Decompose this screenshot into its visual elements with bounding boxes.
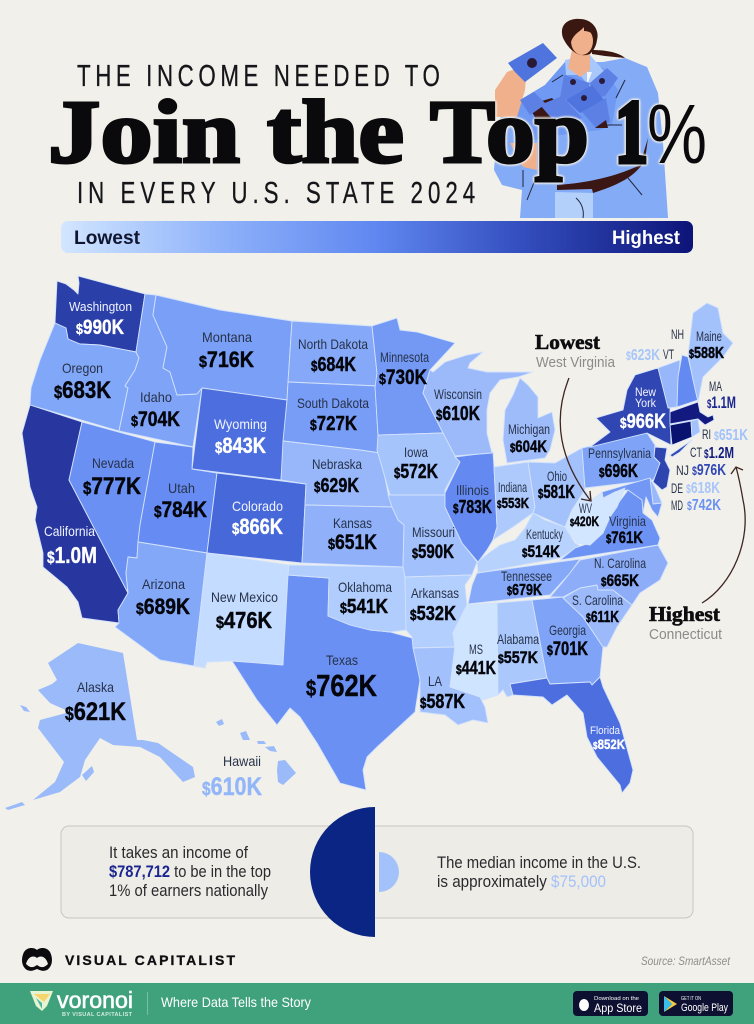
- state: Arkansas: [405, 575, 472, 648]
- label: Idaho: Idaho: [140, 389, 172, 405]
- label: Hawaii: $610K: [202, 773, 262, 801]
- map of U.S. states: [5, 276, 733, 810]
- label: Tennessee: $679K: [507, 582, 542, 599]
- state: Massachusetts: [670, 402, 714, 425]
- button: App Store: Download on the: [594, 996, 639, 1002]
- label: South Carolina: $611K: [586, 609, 619, 626]
- label: Vermont: VT: [663, 346, 674, 362]
- state: Washington: [55, 276, 145, 352]
- label: Montana: [199, 329, 254, 372]
- label: Wisconsin: Wisconsin: [434, 386, 482, 402]
- label: New Mexico: New Mexico: [211, 589, 278, 605]
- label: Alabama: $557K: [498, 648, 539, 667]
- button: Google Play: Google Play: [681, 1002, 728, 1014]
- label: Delaware: $618K: [686, 480, 720, 497]
- label: Oregon: [54, 360, 112, 404]
- title: The income needed to: THE INCOME NEEDED TO: [77, 58, 440, 93]
- label: Arizona: Arizona: [142, 576, 185, 592]
- state: North Dakota: [288, 321, 378, 386]
- label: Nevada: $777K: [83, 473, 142, 500]
- source: Source: SmartAsset: [641, 954, 731, 968]
- label: Nevada: Nevada: [92, 455, 134, 471]
- label: North Carolina: N. Carolina: [594, 555, 646, 571]
- state: South Dakota: [283, 382, 380, 453]
- label: South Dakota: [297, 395, 369, 435]
- label: South Dakota: South Dakota: [297, 395, 369, 411]
- label: Iowa: [394, 444, 438, 483]
- label: Kansas: Kansas: [333, 515, 372, 531]
- state: Idaho: [119, 294, 202, 447]
- label: Indiana: Indiana: [498, 479, 527, 495]
- label: Arizona: $689K: [136, 594, 190, 619]
- label: Illinois: [453, 482, 492, 517]
- text: top 1% national income: $787,712 to be in the top: [109, 863, 271, 881]
- label: Maine: Maine: [696, 328, 722, 344]
- state: Kansas: [302, 505, 404, 567]
- label: Wisconsin: [434, 386, 482, 425]
- label: Utah: Utah: [168, 480, 195, 496]
- state: Pennsylvania: [582, 433, 662, 488]
- label: South Carolina: S. Carolina: [572, 592, 623, 608]
- label: Utah: $784K: [154, 497, 207, 522]
- label: Louisiana: LA: [428, 673, 443, 689]
- label: Pennsylvania: Pennsylvania: [588, 445, 651, 461]
- arrow: to Connecticut: [702, 467, 745, 603]
- label: Washington: [69, 299, 132, 339]
- logo: Visual Capitalist: VISUAL CAPITALIST: [65, 952, 235, 968]
- legend bar: lowest to highest: Highest: [612, 228, 681, 249]
- label: Maine: [689, 328, 724, 362]
- state: Alabama: [497, 600, 547, 697]
- label: Delaware: [671, 480, 720, 497]
- text: median income: The median income in the U.S.: [437, 854, 641, 872]
- state: Oregon: [30, 323, 139, 431]
- label: Missouri: $590K: [412, 542, 454, 563]
- illustration: woman holding money: [494, 19, 668, 218]
- label: Illinois: $783K: [453, 497, 492, 517]
- label: Massachusetts: MA: [709, 378, 722, 394]
- title: Join the Top 1%: [48, 83, 707, 182]
- legend bar: lowest to highest: [61, 221, 693, 253]
- label: Alaska: Alaska: [77, 679, 114, 695]
- state: Ohio: [528, 448, 585, 527]
- label: Alabama: [497, 631, 539, 667]
- label: Colorado: Colorado: [232, 498, 283, 514]
- label: South Dakota: $727K: [310, 413, 357, 435]
- text: top 1% national income: It takes an income of: [109, 844, 248, 862]
- label: New Mexico: $476K: [216, 607, 272, 633]
- state: Louisiana: [413, 647, 488, 725]
- label: Virginia: [606, 513, 646, 547]
- label: Nebraska: [312, 456, 362, 497]
- label: Florida: Florida: [590, 725, 621, 737]
- label: Oklahoma: Oklahoma: [338, 579, 392, 595]
- label: Alaska: [65, 679, 126, 726]
- label: North Carolina: $665K: [601, 571, 640, 590]
- state: Alaska: [33, 643, 195, 800]
- state: Florida: [510, 677, 633, 793]
- state: South Carolina: [563, 585, 632, 647]
- state: New Jersey: [653, 447, 670, 490]
- label: Minnesota: Minnesota: [380, 349, 429, 365]
- title: In every U.S. state 2024: IN EVERY U.S. STATE 2024: [77, 175, 475, 210]
- label: Oklahoma: [338, 579, 392, 618]
- label: Ohio: [538, 468, 575, 502]
- state: Utah: [138, 442, 217, 553]
- label: Tennessee: [501, 568, 552, 599]
- state: Delaware: [650, 478, 662, 504]
- label: Texas: $762K: [306, 668, 378, 703]
- state: New York: [590, 368, 671, 447]
- label: South Carolina: [572, 592, 623, 626]
- label: Massachusetts: $1.1M: [707, 393, 736, 412]
- state: Arizona: [115, 542, 207, 666]
- label: Washington: $990K: [76, 316, 124, 339]
- label: Alaska: $621K: [65, 698, 126, 726]
- title: Join the Top 1%: %: [647, 87, 707, 181]
- label: Nebraska: $629K: [314, 475, 359, 497]
- label: New Jersey: $976K: [692, 462, 726, 479]
- label: New Hampshire abbreviation: NH: [671, 326, 684, 342]
- label: Mississippi: $441K: [456, 658, 496, 678]
- callout: lowest West Virginia: Lowest: [535, 330, 600, 354]
- label: Nevada: [83, 455, 142, 500]
- label: Arkansas: Arkansas: [411, 585, 459, 601]
- state: Nebraska: [281, 441, 392, 507]
- label: Connecticut: $1.2M: [704, 445, 734, 462]
- state: Illinois: [445, 452, 497, 562]
- state: Connecticut: [670, 421, 692, 445]
- label: Virginia: Virginia: [609, 513, 646, 529]
- label: Maine: $588K: [689, 345, 724, 362]
- label: Missouri: [412, 524, 455, 563]
- label: Kansas: [328, 515, 377, 554]
- button: App Store: [573, 991, 648, 1016]
- label: Rhode Island: [702, 426, 748, 444]
- label: Vermont: $623K: [626, 347, 660, 364]
- label: Wyoming: $843K: [215, 433, 266, 458]
- label: Ohio: Ohio: [547, 468, 567, 484]
- label: Georgia: Georgia: [549, 622, 586, 638]
- callout: lowest West Virginia: West Virginia: [536, 354, 616, 371]
- label: Arkansas: [410, 585, 459, 625]
- label: Rhode Island: RI: [702, 426, 711, 442]
- label: Maryland: [671, 497, 721, 514]
- state: Rhode Island: [691, 419, 700, 437]
- state: Oklahoma: [288, 565, 407, 632]
- state: Montana: [153, 295, 292, 400]
- label: Idaho: $704K: [131, 408, 180, 431]
- label: New York: $966K: [620, 410, 666, 433]
- state: Wisconsin and Michigan upper: [423, 352, 533, 456]
- title: Join the Top 1%: Join: [48, 83, 240, 182]
- label: Alabama: Alabama: [497, 631, 539, 647]
- title: Join the Top 1%: Top: [430, 83, 589, 182]
- label: Maryland: $742K: [687, 497, 721, 514]
- callout: highest Connecticut: Connecticut: [649, 626, 723, 643]
- title: Join the Top 1%: the: [267, 83, 404, 182]
- label: Indiana: $553K: [497, 495, 529, 512]
- label: North Dakota: [298, 336, 368, 376]
- state: California: [22, 405, 128, 623]
- label: Oregon: $683K: [54, 377, 112, 404]
- panel: national vs median comparison: [61, 826, 693, 918]
- label: Minnesota: $730K: [379, 366, 427, 389]
- label: Delaware: DE: [671, 480, 683, 496]
- label: Indiana: [497, 479, 529, 512]
- text: top 1% national income: [109, 844, 271, 900]
- label: Virginia: $761K: [606, 528, 644, 547]
- label: Kansas: $651K: [328, 531, 377, 554]
- label: Georgia: [547, 622, 588, 660]
- state: Michigan lower: [503, 378, 555, 463]
- label: New Jersey: NJ: [676, 462, 689, 478]
- button: Google Play: GET IT ON: [681, 996, 701, 1002]
- logo: Voronoi: [30, 987, 133, 1018]
- footer bar: [0, 983, 754, 1024]
- label: Missouri: Missouri: [412, 524, 455, 540]
- label: Nebraska: Nebraska: [312, 456, 362, 472]
- label: North Carolina: [594, 555, 646, 590]
- logo: Visual Capitalist: [22, 948, 235, 971]
- label: Ohio: $581K: [538, 482, 575, 502]
- state: New Hampshire: [677, 355, 698, 407]
- label: Louisiana: [420, 673, 465, 713]
- arrow: to West Virginia: [560, 378, 591, 501]
- label: West Virginia: WV: [579, 500, 592, 516]
- label: Maryland: MD: [671, 497, 683, 513]
- callout: lowest West Virginia: [535, 330, 616, 371]
- label: Mississippi: MS: [469, 641, 483, 657]
- state: Missouri: [388, 495, 477, 577]
- state: Maine: [688, 303, 733, 402]
- label: Connecticut: [690, 444, 734, 462]
- label: Pennsylvania: [588, 445, 651, 481]
- label: Oregon: Oregon: [62, 360, 103, 376]
- label: West Virginia: [570, 500, 599, 529]
- label: North Dakota: $684K: [311, 354, 356, 376]
- label: Mississippi: [456, 641, 496, 678]
- label: New Mexico: [211, 589, 278, 633]
- label: Hawaii: [202, 753, 262, 801]
- label: North Dakota: North Dakota: [298, 336, 368, 352]
- state: West Virginia: [565, 488, 625, 545]
- state: New Mexico: [194, 553, 289, 668]
- state: Nevada: [69, 422, 155, 593]
- state: Hawaii: [216, 719, 296, 785]
- label: Montana: $716K: [199, 347, 254, 372]
- state: Vermont: [658, 360, 680, 408]
- label: Kentucky: $514K: [522, 542, 561, 561]
- label: Kentucky: [522, 526, 563, 561]
- label: Tennessee: Tennessee: [501, 568, 552, 584]
- state: Long Island: [670, 440, 692, 457]
- button: Google Play: [659, 991, 733, 1016]
- state: Mississippi: [450, 603, 498, 700]
- title: Join the Top 1%: 1: [615, 83, 648, 182]
- logo: Voronoi: voronoi: [57, 987, 133, 1013]
- state: Indiana: [493, 462, 535, 540]
- label: Connecticut: CT: [690, 444, 702, 460]
- state: Texas: [232, 575, 420, 790]
- label: Minnesota: [379, 349, 429, 389]
- label: Illinois: Illinois: [456, 482, 489, 498]
- label: Pennsylvania: $696K: [599, 461, 638, 481]
- state: Wyoming: [192, 388, 287, 480]
- label: California: $1.0M: [47, 542, 97, 568]
- label: Florida: $852K: [593, 736, 625, 752]
- label: Montana: Montana: [202, 329, 252, 345]
- label: Massachusetts: [707, 378, 736, 412]
- text: top 1% national income: 1% of earners nationally: [109, 882, 269, 900]
- state: Iowa: [377, 433, 460, 495]
- state: Tennessee: [468, 559, 580, 604]
- state: Colorado: [207, 473, 306, 563]
- label: California: [44, 523, 97, 568]
- label: Wyoming: Wyoming: [214, 416, 267, 432]
- state: Maryland: [602, 478, 662, 517]
- state: Georgia: [532, 597, 603, 685]
- state: Alaska islands: [5, 705, 94, 810]
- label: Idaho: [131, 389, 180, 431]
- chart: median half circle: [379, 852, 399, 892]
- label: Wisconsin: $610K: [436, 403, 480, 425]
- label: Washington: Washington: [69, 299, 132, 314]
- callout: highest Connecticut: [649, 602, 723, 643]
- label: Florida: [590, 725, 625, 752]
- label: Louisiana: $587K: [420, 691, 465, 713]
- label: Texas: [306, 652, 378, 703]
- label: Iowa: Iowa: [404, 444, 428, 460]
- label: Hawaii: Hawaii: [223, 753, 261, 769]
- tagline: Where Data Tells the Story: [161, 994, 311, 1010]
- chart: top 1% half circle: [310, 807, 375, 937]
- callout: highest Connecticut: Highest: [649, 602, 720, 626]
- label: Texas: Texas: [326, 652, 358, 668]
- legend bar: lowest to highest: Lowest: [74, 228, 141, 249]
- text: median income: is approximately $75,000: [437, 873, 606, 891]
- label: Arkansas: $532K: [410, 603, 456, 625]
- label: Arizona: [136, 576, 190, 619]
- label: New York: New: [635, 385, 656, 399]
- state: Virginia: [560, 490, 660, 560]
- label: Michigan: $604K: [510, 437, 548, 456]
- label: Michigan: Michigan: [508, 421, 550, 437]
- state: Kentucky: [477, 513, 580, 573]
- state: North Carolina: [550, 545, 668, 605]
- button: App Store: App Store: [594, 1001, 642, 1015]
- label: Michigan: [508, 421, 550, 456]
- label: Utah: [154, 480, 207, 522]
- label: Iowa: $572K: [394, 461, 438, 483]
- label: New Jersey: [676, 462, 726, 479]
- state: Minnesota: [372, 318, 455, 435]
- label: West Virginia: $420K: [570, 513, 599, 529]
- label: Colorado: [232, 498, 283, 539]
- label: Kentucky: Kentucky: [526, 526, 563, 542]
- label: California: California: [44, 523, 95, 539]
- label: New York: York: [635, 396, 657, 410]
- label: Colorado: $866K: [232, 514, 283, 539]
- label: Oklahoma: $541K: [340, 596, 388, 618]
- label: Georgia: $701K: [547, 639, 588, 660]
- label: New York: [620, 385, 666, 433]
- text: median income: [437, 854, 641, 891]
- label: Wyoming: [214, 416, 267, 458]
- logo: Voronoi: BY VISUAL CAPITALIST: [62, 1012, 133, 1018]
